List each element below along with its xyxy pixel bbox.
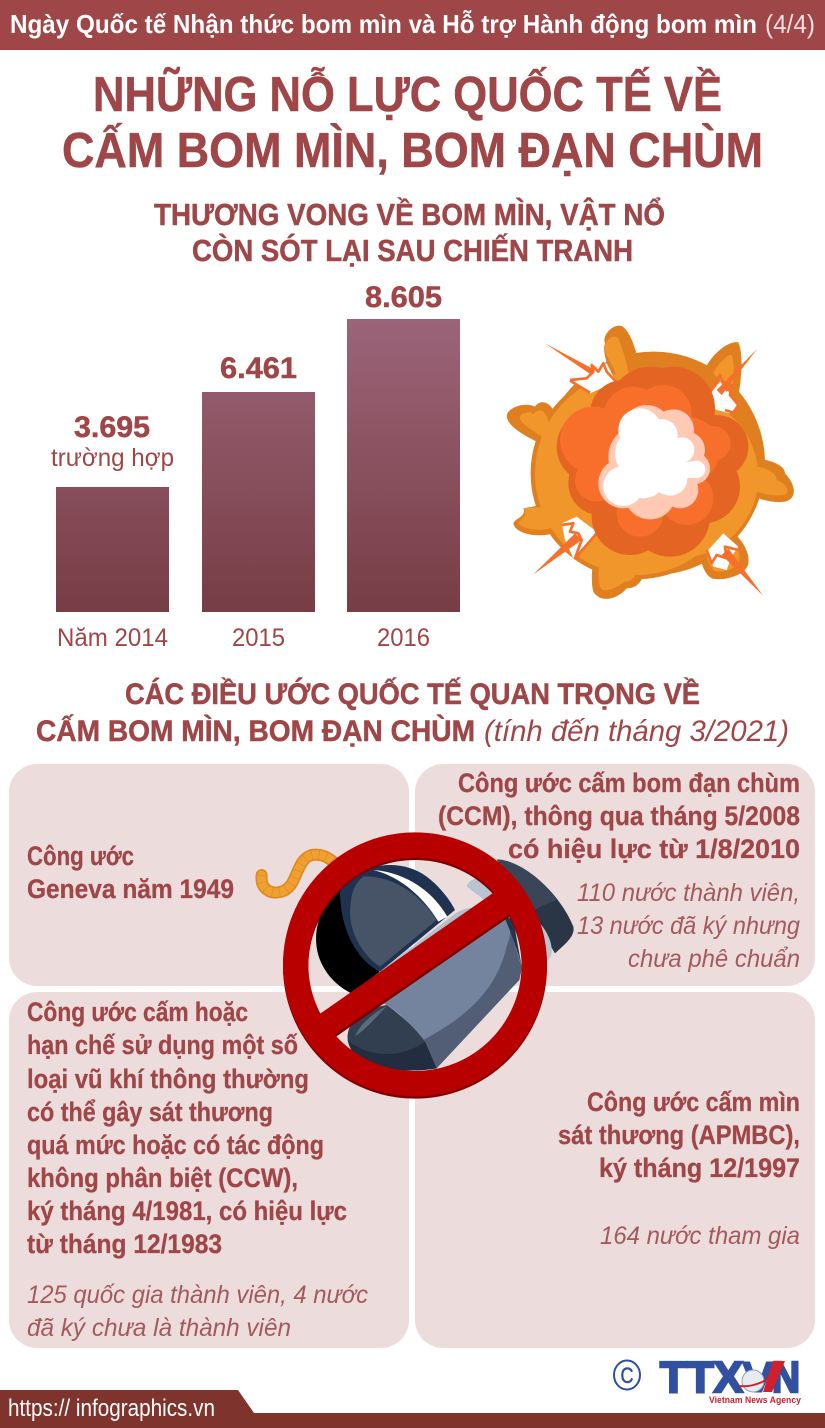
logo: TTXVN	[660, 1353, 801, 1405]
prohibition sign	[296, 845, 534, 1086]
panel: CCW: đã ký chưa là thành viên	[27, 1314, 291, 1342]
panel: CCW: Công ước cấm hoặc	[27, 997, 248, 1027]
bar 2016: 8.605	[365, 281, 442, 314]
copyright mark	[614, 1360, 640, 1390]
footer band with url: https:// infographics.vn	[8, 1395, 215, 1422]
title: NHỮNG NỖ LỰC QUỐC TẾ VỀ	[93, 67, 722, 122]
panel: CCM: 13 nước đã ký nhưng	[577, 912, 800, 940]
panel: APMBC: ký tháng 12/1997	[599, 1153, 800, 1183]
treaties heading: CÁC ĐIỀU ƯỚC QUỐC TẾ QUAN TRỌNG VỀ	[125, 677, 700, 711]
icon: banned bomb	[261, 845, 574, 1086]
bar 2014: Năm 2014	[57, 624, 168, 652]
footer band with url	[0, 1390, 825, 1428]
panel: APMBC	[415, 992, 815, 1348]
panel: CCM: có hiệu lực từ 1/8/2010	[508, 834, 800, 864]
panel: Geneva 1949: Công ước	[27, 841, 134, 871]
bar 2014: 3.695	[74, 411, 150, 444]
panel: CCW: ký tháng 4/1981, có hiệu lực	[27, 1196, 347, 1226]
bar 2014	[51, 411, 174, 652]
spark cut-outs	[562, 363, 740, 570]
panel: CCW: từ tháng 12/1983	[27, 1229, 222, 1259]
fuse	[261, 855, 333, 893]
bar 2015: 2015	[232, 624, 285, 652]
copyright mark: C	[620, 1363, 634, 1388]
bar 2015: 6.461	[220, 352, 297, 385]
title: CẤM BOM MÌN, BOM ĐẠN CHÙM	[62, 123, 763, 178]
panel: CCW: quá mức hoặc có tác động	[27, 1130, 324, 1160]
chart heading: CÒN SÓT LẠI SAU CHIẾN TRANH	[192, 232, 633, 268]
logo: TTXVN: N	[772, 1353, 800, 1402]
chart heading: THƯƠNG VONG VỀ BOM MÌN, VẬT NỔ	[154, 196, 665, 232]
panel: CCW: không phân biệt (CCW),	[27, 1163, 298, 1193]
title	[62, 67, 763, 178]
bomb body	[316, 859, 574, 1070]
bar 2016	[347, 281, 460, 652]
treaties heading	[36, 677, 789, 748]
chart heading	[154, 196, 665, 268]
panel: CCW: loại vũ khí thông thường	[27, 1064, 309, 1094]
panel: CCM: chưa phê chuẩn	[628, 945, 800, 973]
panel: Geneva 1949	[9, 764, 409, 986]
panel: Geneva 1949: Geneva năm 1949	[27, 874, 234, 904]
panel: APMBC: 164 nước tham gia	[600, 1222, 800, 1250]
panel: CCW	[9, 992, 409, 1348]
header banner: (4/4)	[765, 9, 815, 39]
treaties heading: (tính đến tháng 3/2021)	[484, 715, 789, 748]
logo: TTXVN: TTX	[660, 1353, 743, 1402]
bar chart: casualties	[51, 281, 460, 652]
logo: TTXVN: Vietnam News Agency	[709, 1395, 801, 1405]
panel: CCW: 125 quốc gia thành viên, 4 nước	[27, 1281, 368, 1309]
panel: CCM: 110 nước thành viên,	[577, 879, 800, 907]
panel: CCM	[415, 764, 815, 986]
bar 2016: 2016	[377, 624, 430, 652]
icon: explosion	[507, 326, 794, 599]
header banner	[0, 0, 825, 50]
bar 2015	[202, 352, 315, 652]
bar 2014: trường hợp	[51, 444, 174, 472]
logo: TTXVN: V	[742, 1353, 775, 1402]
panel: CCW: có thể gây sát thương	[27, 1097, 273, 1127]
header banner: Ngày Quốc tế Nhận thức bom mìn và Hỗ trợ Hành động bom mìn	[10, 9, 757, 39]
panel: CCW: hạn chế sử dụng một số	[27, 1030, 298, 1060]
treaties heading: CẤM BOM MÌN, BOM ĐẠN CHÙM	[36, 714, 475, 748]
panel: CCM: (CCM), thông qua tháng 5/2008	[438, 801, 800, 831]
